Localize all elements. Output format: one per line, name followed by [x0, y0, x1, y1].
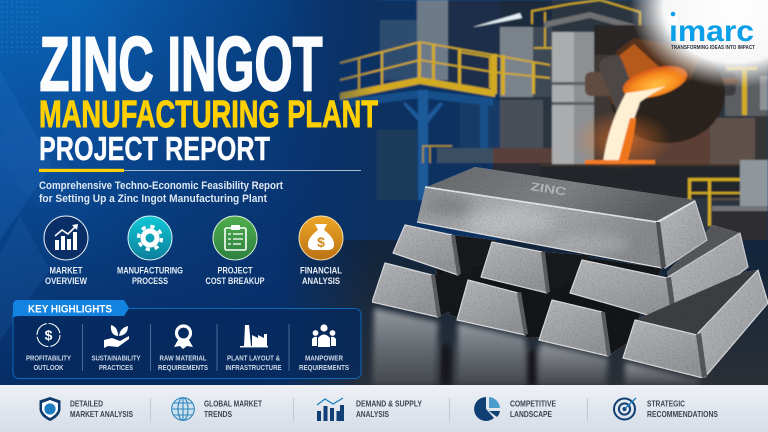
- feature: market overview: OVERVIEW: [45, 276, 88, 287]
- title underline: [39, 169, 361, 172]
- item: strategic recommendations: STRATEGIC: [647, 400, 685, 408]
- highlight: profitability outlook: [26, 324, 71, 372]
- highlight: sustainability practices: [92, 325, 141, 372]
- highlight: raw material requirements: RAW MATERIAL: [160, 354, 207, 362]
- ingot: middle lower: [457, 280, 568, 335]
- item: global market trends: TRENDS: [204, 410, 232, 419]
- subtitle: Comprehensive Techno-Economic Feasibility Report: [39, 180, 283, 192]
- item: competitive landscape: COMPETITIVE: [510, 400, 556, 408]
- subtitle: for Setting Up a Zinc Ingot Manufacturing Plant: [39, 193, 267, 205]
- feature: market overview: MARKET: [50, 266, 83, 276]
- background photo: factory interior: [280, 0, 768, 385]
- feature: project cost breakup: PROJECT: [218, 266, 253, 276]
- highlight: sustainability practices: PRACTICES: [99, 363, 133, 372]
- title: [39, 22, 378, 168]
- heading tab: key highlights: [13, 300, 129, 318]
- ingot: back-left upper: [393, 225, 495, 275]
- highlight: sustainability practices: SUSTAINABILITY: [92, 354, 141, 362]
- imarc logo: TRANSFORMING IDEAS INTO IMPACT: [671, 45, 755, 51]
- item: demand and supply analysis: [317, 398, 422, 421]
- highlight: raw material requirements: REQUIREMENTS: [158, 363, 208, 372]
- ingot: top with ZINC mark: ZINC: [530, 181, 567, 199]
- ingot stack: [372, 167, 768, 378]
- ingot: back-left lower: [372, 263, 482, 317]
- ingot: middle upper: [481, 242, 590, 293]
- bottom strip: [0, 385, 768, 432]
- title: PROJECT REPORT: [39, 131, 270, 168]
- item: demand and supply analysis: ANALYSIS: [356, 410, 389, 419]
- highlight: profitability outlook: OUTLOOK: [34, 363, 64, 372]
- feature: market overview: [44, 216, 88, 287]
- subtitle: [39, 180, 283, 205]
- imarc logo: imarc: [669, 15, 754, 48]
- item: detailed market analysis: DETAILED: [70, 400, 103, 408]
- feature: manufacturing process: PROCESS: [132, 276, 168, 287]
- right darkening of blue background: [80, 0, 380, 385]
- highlight: plant layout and infrastructure: [226, 325, 282, 372]
- highlight: raw material requirements: [158, 326, 208, 372]
- feature: project cost breakup: [206, 216, 265, 287]
- feature: financial analysis: $: [317, 234, 325, 250]
- feature: financial analysis: [299, 216, 343, 287]
- highlight: profitability outlook: $: [45, 327, 53, 343]
- feature: financial analysis: ANALYSIS: [302, 276, 340, 287]
- item: competitive landscape: LANDSCAPE: [510, 410, 552, 419]
- highlight: plant layout and infrastructure: INFRASTRUCTURE: [226, 363, 282, 372]
- item: demand and supply analysis: DEMAND & SUPPLY: [356, 400, 422, 408]
- polished floor with reflections: [280, 240, 768, 385]
- decorative triangles and halftone: [0, 0, 85, 340]
- title: MANUFACTURING PLANT: [39, 94, 378, 136]
- ingot: top with ZINC mark: [417, 167, 707, 268]
- highlight: manpower requirements: [299, 324, 349, 372]
- title: ZINC INGOT: [40, 22, 322, 108]
- highlight: manpower requirements: REQUIREMENTS: [299, 363, 349, 372]
- panel: key highlights: [13, 300, 361, 378]
- item: detailed market analysis: MARKET ANALYSIS: [70, 410, 133, 419]
- item: strategic recommendations: [614, 398, 718, 420]
- feature: manufacturing process: [117, 216, 183, 287]
- highlight: profitability outlook: PROFITABILITY: [26, 354, 71, 362]
- item: global market trends: GLOBAL MARKET: [204, 400, 262, 408]
- item: strategic recommendations: RECOMMENDATIONS: [647, 410, 718, 419]
- heading tab: key highlights: KEY HIGHLIGHTS: [28, 304, 112, 316]
- highlight: manpower requirements: MANPOWER: [305, 354, 344, 362]
- item: competitive landscape: [474, 397, 556, 421]
- feature: manufacturing process: MANUFACTURING: [117, 266, 183, 276]
- feature: financial analysis: FINANCIAL: [300, 266, 342, 276]
- item: detailed market analysis: [40, 397, 133, 421]
- item: global market trends: [172, 398, 262, 420]
- ingot: right middle large: [570, 225, 748, 322]
- stack shadow: [425, 235, 662, 338]
- ingot: front right: [623, 270, 768, 378]
- feature: project cost breakup: COST BREAKUP: [206, 276, 265, 287]
- ingot: right lower small: [539, 300, 642, 356]
- logo backdrop glow: [630, 0, 768, 88]
- highlight: plant layout and infrastructure: PLANT LAYOUT &: [227, 354, 281, 362]
